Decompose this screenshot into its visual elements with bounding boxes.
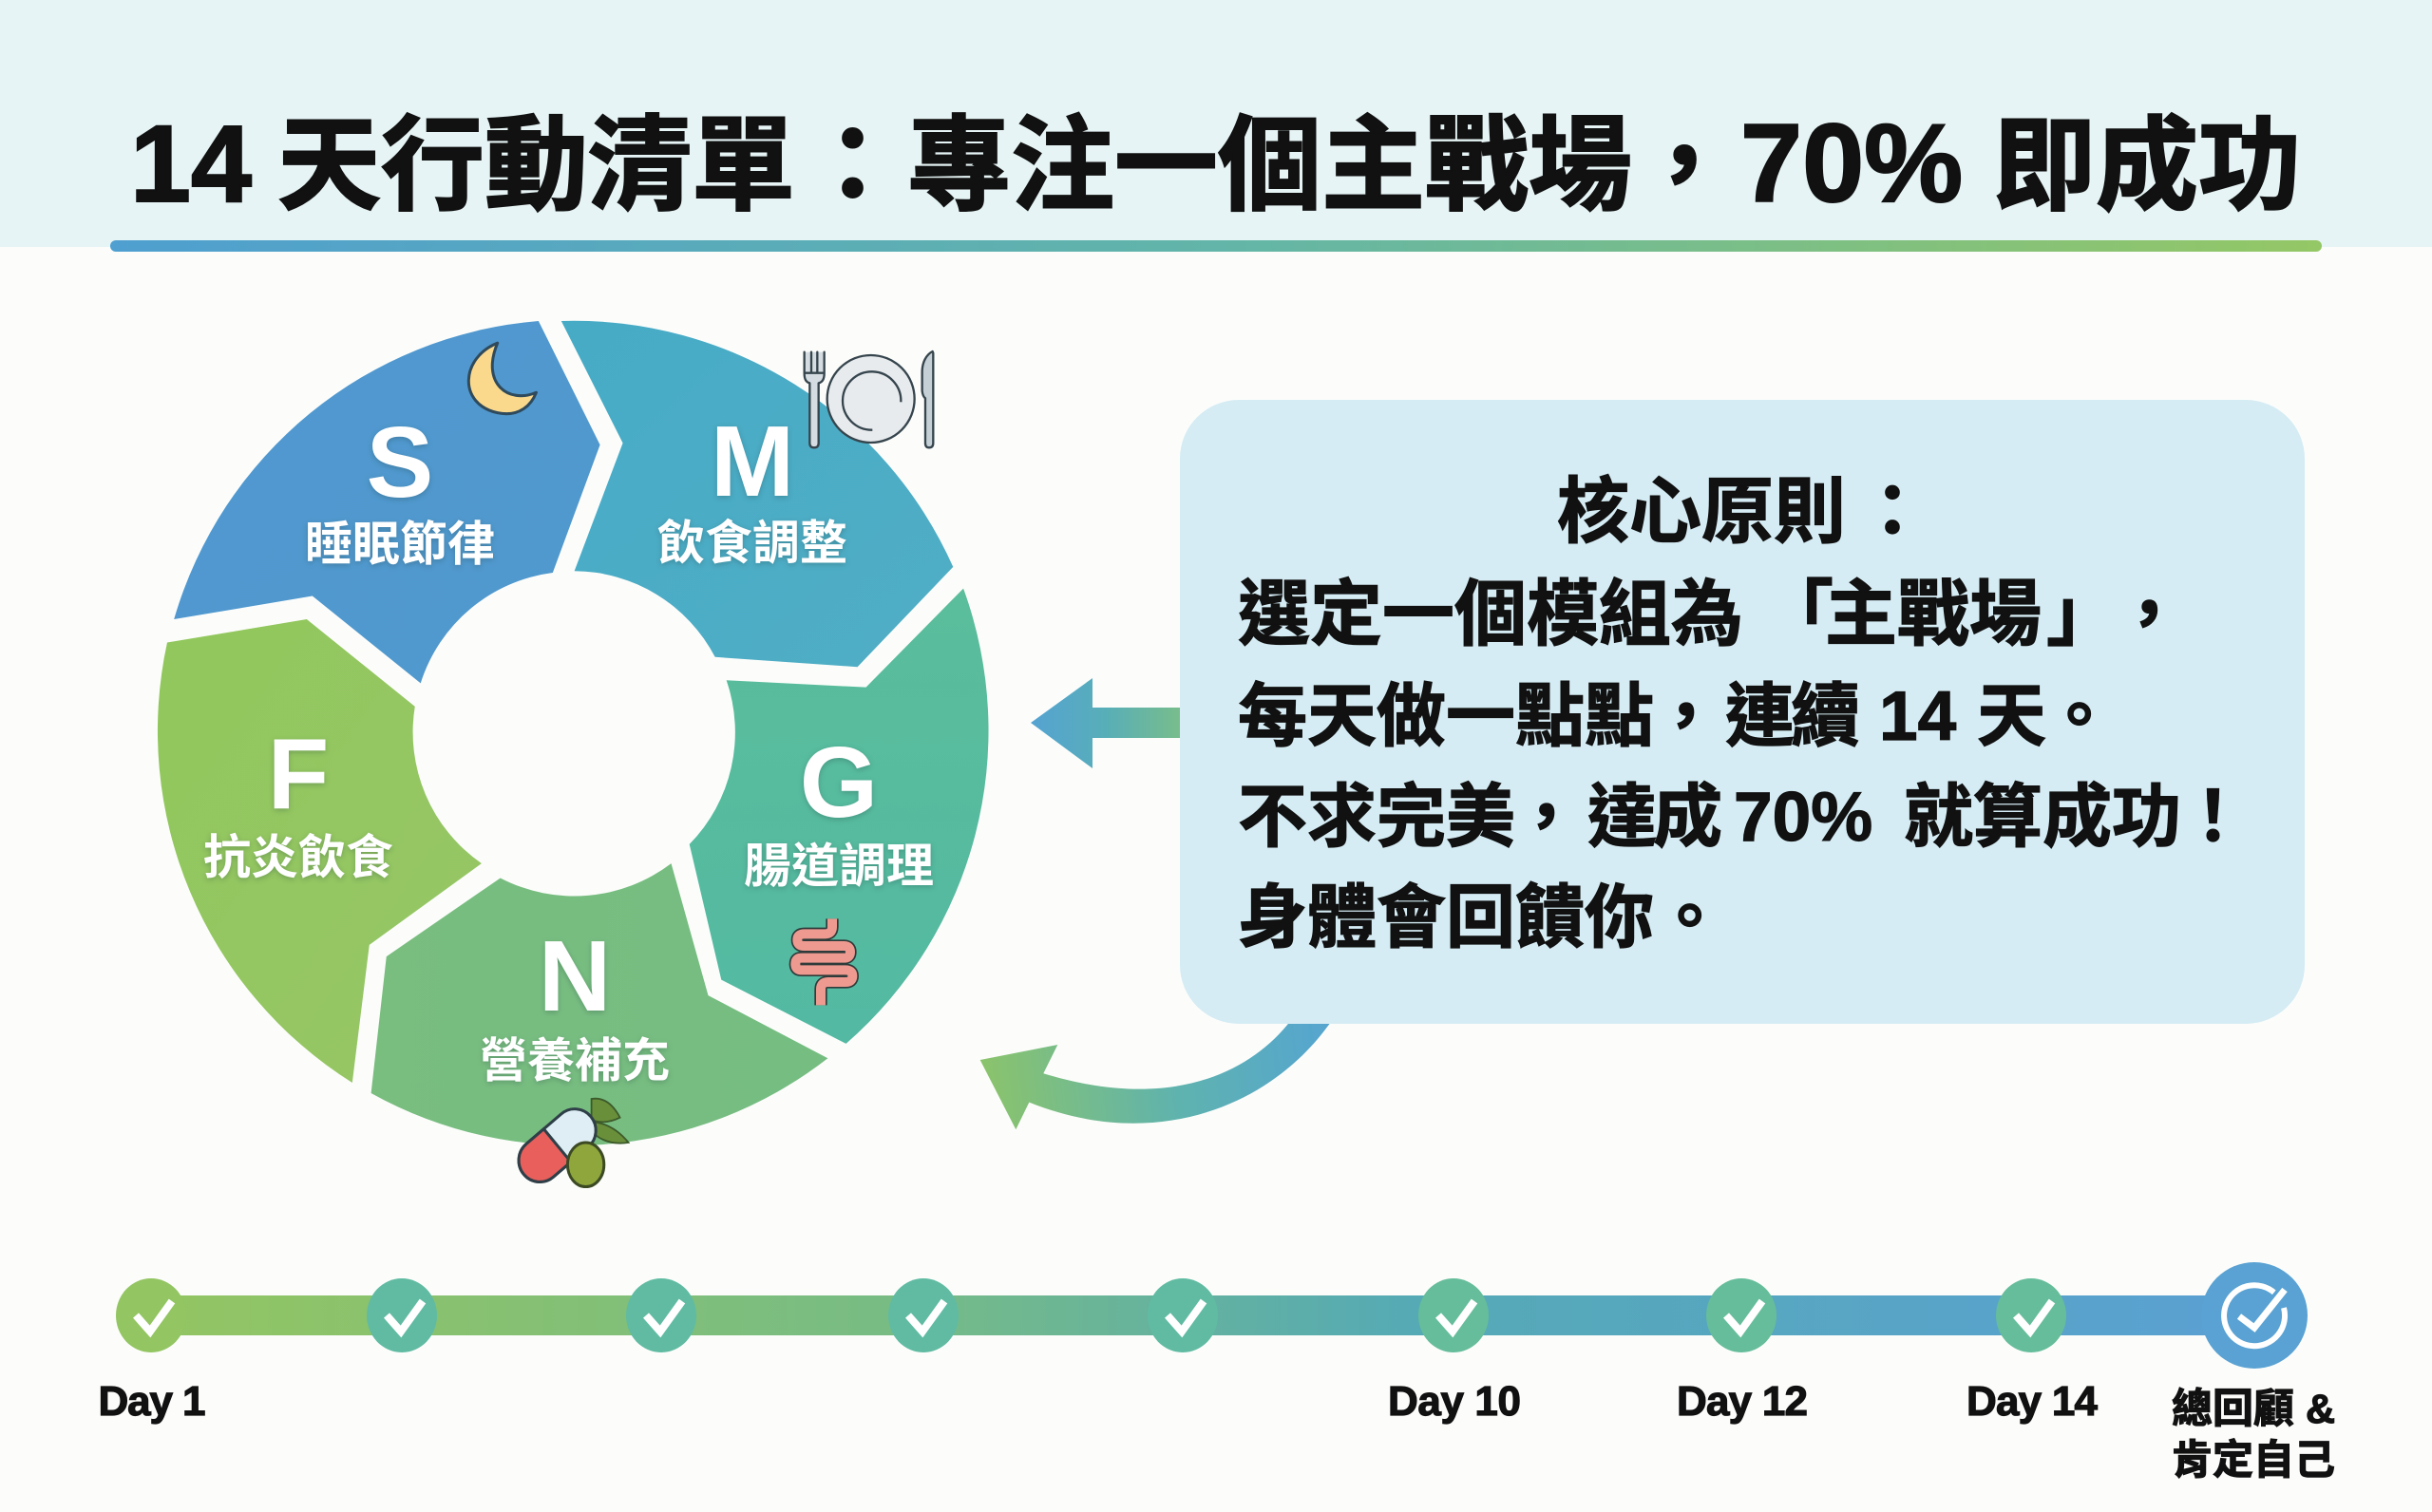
title: 70% bbox=[1740, 101, 1963, 225]
title: 14 bbox=[130, 104, 252, 225]
milestone: Day 12: Day 12 bbox=[1677, 1378, 1808, 1425]
label S: S bbox=[367, 406, 433, 519]
callout line 2: 連續 bbox=[1725, 678, 1858, 755]
segment S bbox=[174, 321, 600, 683]
timeline bar bbox=[151, 1295, 2254, 1335]
title: 專注一個主戰場 bbox=[907, 108, 1632, 224]
callout line 2: 14 bbox=[1879, 678, 1957, 755]
title underline bbox=[110, 240, 2322, 252]
label M: 飲食調整 bbox=[657, 517, 847, 570]
milestone: Day 14 bbox=[1966, 1278, 2099, 1425]
callout heading: ： bbox=[1856, 472, 1928, 553]
segment M bbox=[561, 321, 953, 667]
label N: 營養補充 bbox=[480, 1034, 670, 1087]
callout line 1: ， bbox=[2113, 575, 2185, 655]
timeline bbox=[99, 1262, 2335, 1484]
callout line 1: 「 bbox=[1761, 575, 1834, 655]
milestone: Day 1 bbox=[99, 1278, 205, 1425]
segment N bbox=[371, 863, 827, 1145]
icon: capsule and olive bbox=[510, 1099, 629, 1191]
callout line 3: 就算成功 bbox=[1904, 779, 2181, 856]
milestone: Day 14: Day 14 bbox=[1966, 1378, 2099, 1425]
milestone: day marker 4 bbox=[888, 1278, 959, 1352]
label S bbox=[305, 406, 495, 571]
callout line 2: ， bbox=[1651, 678, 1720, 755]
label S: 睡眠節律 bbox=[305, 518, 495, 571]
callout line 3: 70% bbox=[1734, 779, 1872, 856]
callout heading: 核心原則 bbox=[1557, 472, 1846, 553]
callout line 1: 選定一個模組為 bbox=[1238, 575, 1743, 655]
callout line 3: 達成 bbox=[1587, 779, 1720, 856]
callout line 1: 」 bbox=[2046, 575, 2118, 655]
title: ： bbox=[801, 108, 904, 224]
arrow: callout to wheel bbox=[1031, 678, 1183, 768]
milestone: final review: 肯定自己 bbox=[2172, 1438, 2335, 1484]
milestone: day marker 5 bbox=[1148, 1278, 1218, 1352]
callout line 3: ！ bbox=[2178, 779, 2248, 856]
segment F bbox=[158, 619, 482, 1083]
milestone: day marker 2 bbox=[367, 1278, 437, 1352]
label G bbox=[744, 727, 934, 893]
wheel segments bbox=[158, 321, 989, 1191]
icon: plate and cutlery bbox=[805, 351, 933, 447]
milestone: Day 1: Day 1 bbox=[99, 1378, 205, 1425]
callout line 2: 天 bbox=[1977, 678, 2046, 755]
milestone: Day 10: Day 10 bbox=[1388, 1378, 1521, 1425]
label M: M bbox=[711, 406, 794, 518]
header band bbox=[0, 0, 2432, 247]
icon: moon bbox=[468, 343, 536, 414]
label F bbox=[203, 718, 393, 884]
label F: F bbox=[268, 718, 329, 830]
segment G bbox=[690, 589, 989, 1044]
milestone: Day 10 bbox=[1388, 1278, 1521, 1425]
arrow: curved feedback bbox=[980, 1021, 1332, 1129]
callout line 4: 身體會回饋你 bbox=[1238, 879, 1654, 956]
callout line 1: 主戰場 bbox=[1825, 575, 2042, 655]
title: 即成功 bbox=[1993, 108, 2301, 223]
label G: G bbox=[800, 727, 878, 839]
callout line 4: 。 bbox=[1655, 879, 1724, 956]
label G: 腸道調理 bbox=[744, 840, 934, 893]
milestone: Day 12 bbox=[1677, 1278, 1808, 1425]
callout line 3: ， bbox=[1511, 779, 1581, 856]
callout line 2: 每天做一點點 bbox=[1238, 678, 1654, 755]
callout line 2: 。 bbox=[2044, 678, 2114, 755]
label F: 抗炎飲食 bbox=[203, 831, 393, 884]
callout line 3: 不求完美 bbox=[1238, 779, 1515, 856]
wheel: five SMFGN modules bbox=[158, 321, 989, 1191]
label N: N bbox=[539, 920, 611, 1032]
callout panel: core principle bbox=[1180, 400, 2305, 1024]
milestone: final review bbox=[2172, 1262, 2335, 1484]
title: ， bbox=[1632, 108, 1736, 224]
title: 天行動清單 bbox=[277, 108, 795, 224]
label M bbox=[657, 406, 847, 570]
milestone: day marker 3 bbox=[626, 1278, 696, 1352]
milestone: final review: 總回顧 & bbox=[2172, 1387, 2335, 1432]
icon: intestine bbox=[795, 918, 852, 1005]
label N bbox=[480, 920, 670, 1087]
